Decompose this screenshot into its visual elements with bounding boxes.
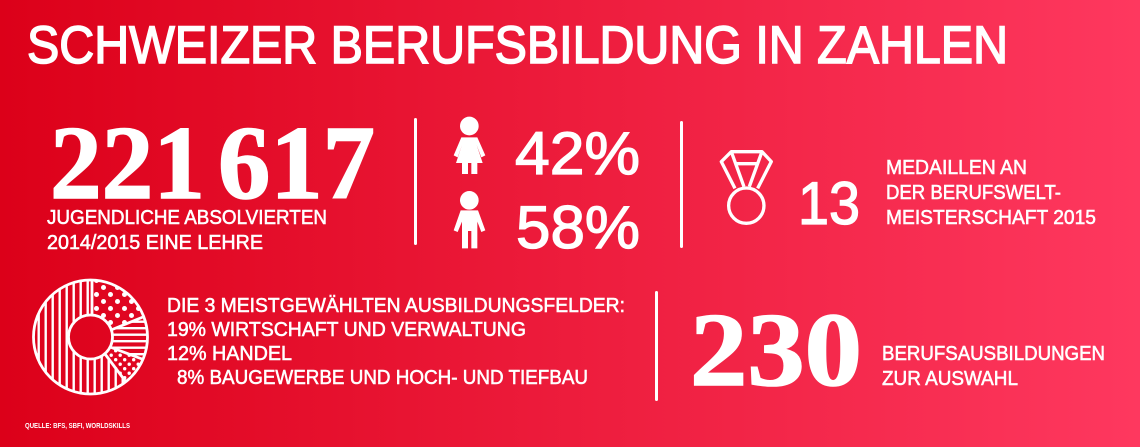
occupations caption: ZUR AUSWAHL [882,368,1018,390]
fields text [167,295,625,389]
fields text: DIE 3 MEISTGEWÄHLTEN AUSBILDUNGSFELDER: [167,295,625,317]
number 221617: 221 [50,104,205,221]
number 221617 [50,104,375,221]
text: 42 percent: 42% [515,120,640,187]
panel: training fields [34,280,625,394]
text: 58 percent: 58% [516,194,640,261]
apprentices caption: 2014/2015 EINE LEHRE [47,232,263,254]
title: SCHWEIZER BERUFSBILDUNG IN ZAHLEN [27,16,1008,75]
apprentices caption: JUGENDLICHE ABSOLVIERTEN [47,207,327,229]
panel: medals [721,152,1096,237]
occupations caption [882,343,1105,390]
icon: medal [721,152,771,223]
fields text: 12% HANDEL [167,343,292,365]
text: 13: 13 [798,170,860,237]
medals caption [886,157,1096,229]
panel: apprentices stat [47,104,375,254]
panel: gender split [454,117,640,261]
number 230: 230 [690,291,862,408]
fields text: 8% BAUGEWERBE UND HOCH- UND TIEFBAU [177,367,588,389]
medals caption: MEDAILLEN AN [886,157,1027,179]
number 221617: 617 [218,104,375,221]
medals caption: DER BERUFSWELT- [886,182,1061,204]
chart: patterned donut [34,280,148,394]
icon: woman [454,117,485,174]
medals caption: MEISTERSCHAFT 2015 [886,207,1096,229]
fields text: 19% WIRTSCHAFT UND VERWALTUNG [167,319,526,341]
panel: occupations [690,291,1105,408]
apprentices caption [47,207,327,254]
occupations caption: BERUFSAUSBILDUNGEN [882,343,1105,365]
source note: QUELLE: BFS, SBFI, WORLDSKILLS [25,423,130,430]
icon: man [454,191,485,248]
